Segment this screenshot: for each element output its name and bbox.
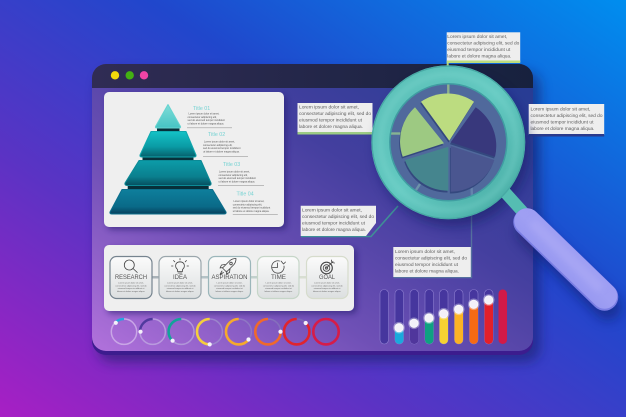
step card: goal: eiusmod tempor incididunt ut bbox=[314, 287, 341, 290]
pyramid label: Title 02: ut labore et dolore magna aliqua. bbox=[203, 150, 240, 153]
step card: idea: eiusmod tempor incididunt ut bbox=[167, 287, 194, 290]
pie chart bbox=[399, 94, 496, 194]
slider knobs bbox=[394, 295, 493, 332]
slider fills bbox=[395, 290, 507, 344]
step card: aspiration: eiusmod tempor incididunt ut bbox=[216, 287, 243, 290]
lens ring bbox=[372, 66, 524, 218]
lens spokes bbox=[390, 84, 472, 198]
slice: green bbox=[400, 107, 444, 157]
pyramid label: Title 04: sed do eiusmod tempor incididunt bbox=[233, 207, 270, 210]
step card: idea: IDEA bbox=[173, 274, 188, 281]
callout: top: Lorem ipsum dolor sit amet, bbox=[447, 34, 507, 40]
callout: lower left bbox=[301, 206, 398, 236]
handle grip bbox=[527, 221, 604, 297]
ring 3: teal bbox=[169, 319, 194, 344]
callout: upper left: labore et dolore magna aliqua. bbox=[299, 124, 363, 130]
step card: goal: consectetur adipiscing elit, sed do bbox=[311, 284, 343, 287]
step card: time: eiusmod tempor incididunt ut bbox=[265, 287, 292, 290]
pyramid label: Title 03: ut labore et dolore magna aliqua. bbox=[218, 180, 255, 183]
icon: clock bbox=[272, 261, 286, 273]
slice: lime bbox=[421, 94, 474, 141]
slice: indigo bbox=[451, 107, 496, 157]
pyramid label: Title 02: Title 02 bbox=[208, 132, 225, 138]
callout: right: labore et dolore magna aliqua. bbox=[530, 126, 594, 132]
pyramid label: Title 03: sed do eiusmod tempor incididunt bbox=[218, 177, 256, 180]
icon: rocket bbox=[220, 258, 236, 274]
step card: research: consectetur adipiscing elit, sed do bbox=[115, 284, 147, 287]
pyramid label: Title 01: sed do eiusmod tempor incididunt bbox=[188, 119, 225, 122]
callout: lower left: Lorem ipsum dolor sit amet, bbox=[302, 208, 362, 214]
step card: time: consectetur adipiscing elit, sed do bbox=[263, 284, 295, 287]
step card: aspiration: labore et dolore magna aliqua. bbox=[215, 290, 244, 293]
ring 6: orange bbox=[255, 319, 283, 344]
ring 8: crimson bbox=[313, 319, 339, 344]
callout: lower centre bbox=[393, 205, 472, 278]
pyramid label: Title 03: consectetur adipiscing elit, bbox=[218, 174, 248, 177]
progress rings bbox=[111, 319, 339, 346]
pyramid label: Title 01: Title 01 bbox=[193, 106, 210, 112]
ring 7: red bbox=[284, 319, 309, 344]
callout: lower centre: eiusmod tempor incididunt ut bbox=[395, 262, 459, 268]
step card: research: Lorem ipsum dolor sit amet, bbox=[118, 282, 144, 284]
step card: goal: Lorem ipsum dolor sit amet, bbox=[314, 282, 340, 284]
browser window panel bbox=[92, 64, 540, 362]
pyramid label: Title 02: sed do eiusmod tempor incididunt bbox=[203, 147, 241, 150]
step card: time: Lorem ipsum dolor sit amet, bbox=[266, 282, 292, 284]
callout: right bbox=[529, 104, 604, 136]
callout: upper left: Lorem ipsum dolor sit amet, bbox=[299, 104, 359, 110]
step card: aspiration: consectetur adipiscing elit, sed do bbox=[214, 284, 246, 287]
handle neck bbox=[503, 190, 530, 220]
pyramid label: Title 01: consectetur adipiscing elit, bbox=[188, 116, 217, 119]
pyramid label: Title 02: consectetur adipiscing elit, bbox=[203, 144, 233, 147]
callout: lower left: consectetur adipiscing elit, sed do bbox=[302, 214, 374, 220]
pyramid label: Title 04: consectetur adipiscing elit, bbox=[233, 203, 262, 206]
slice: slate bbox=[451, 146, 494, 192]
pyramid label: Title 03: Title 03 bbox=[223, 162, 240, 168]
step card: time: labore et dolore magna aliqua. bbox=[264, 290, 293, 293]
callout: upper left: consectetur adipiscing elit, sed do bbox=[299, 111, 371, 117]
pyramid label: Title 04: ut labore et dolore magna aliqua. bbox=[233, 210, 270, 213]
panel: pyramid infographic bbox=[104, 92, 287, 230]
step card: research: RESEARCH bbox=[115, 274, 147, 281]
pyramid chart bbox=[110, 104, 226, 214]
callout: right: consectetur adipiscing elit, sed do bbox=[530, 113, 603, 119]
step card: aspiration bbox=[208, 256, 250, 298]
panel: process steps bbox=[104, 245, 357, 314]
slice: teal bbox=[405, 147, 448, 191]
step card: aspiration: ASPIRATION bbox=[212, 274, 248, 281]
step card: idea: Lorem ipsum dolor sit amet, bbox=[167, 282, 193, 284]
ring 1: blue bbox=[111, 319, 137, 344]
pyramid label: Title 03: Lorem ipsum dolor sit amet, bbox=[219, 170, 250, 174]
ring 2: violet bbox=[138, 319, 165, 344]
step card: aspiration: Lorem ipsum dolor sit amet, bbox=[217, 282, 243, 284]
pyramid label: Title 01: ut labore et dolore magna aliqua. bbox=[188, 122, 224, 125]
step card: idea: consectetur adipiscing elit, sed do bbox=[164, 284, 196, 287]
step card: goal: labore et dolore magna aliqua. bbox=[313, 290, 341, 293]
callout: right: Lorem ipsum dolor sit amet, bbox=[530, 106, 590, 112]
slider bar chart bbox=[380, 290, 507, 344]
step card: goal bbox=[306, 256, 348, 298]
pyramid label: Title 04 bbox=[233, 192, 278, 215]
icon: magnifier bbox=[124, 260, 137, 272]
pyramid label: Title 04: Lorem ipsum dolor sit amet, bbox=[234, 200, 265, 203]
step card: idea bbox=[159, 256, 201, 298]
pyramid label: Title 02 bbox=[203, 132, 248, 157]
callout: top: eiusmod tempor incididunt ut bbox=[447, 47, 511, 53]
step card: time: TIME bbox=[271, 274, 287, 281]
step card: research: eiusmod tempor incididunt ut bbox=[118, 287, 145, 290]
callout: lower left: eiusmod tempor incididunt ut bbox=[302, 220, 366, 226]
callout: lower centre: consectetur adipiscing elit, sed do bbox=[395, 256, 467, 262]
icon: target bbox=[321, 260, 334, 274]
callout: right: eiusmod tempor incididunt ut bbox=[530, 120, 594, 126]
pyramid label: Title 01 bbox=[187, 106, 232, 128]
pie slice shadows bbox=[399, 95, 495, 194]
magnifying glass bbox=[372, 66, 608, 307]
callout: top bbox=[447, 32, 520, 74]
window control dots bbox=[111, 71, 148, 80]
magnifier shadow bbox=[377, 74, 608, 307]
callout: upper left: eiusmod tempor incididunt ut bbox=[299, 118, 363, 124]
pyramid label: Title 03 bbox=[218, 162, 264, 186]
step card: research: labore et dolore magna aliqua. bbox=[117, 290, 145, 293]
step card: goal: GOAL bbox=[319, 274, 335, 281]
pyramid label: Title 02: Lorem ipsum dolor sit amet, bbox=[204, 140, 235, 144]
pyramid label: Title 01: Lorem ipsum dolor sit amet, bbox=[188, 112, 220, 116]
icon: light bulb bbox=[172, 258, 188, 273]
step card: idea: labore et dolore magna aliqua. bbox=[166, 290, 194, 293]
callout: upper left bbox=[298, 103, 372, 134]
callout: lower left: labore et dolore magna aliqua. bbox=[302, 227, 366, 233]
step card: research bbox=[110, 256, 152, 298]
step card: time bbox=[258, 256, 299, 298]
slider tracks bbox=[380, 290, 493, 344]
lens disc bbox=[388, 82, 508, 202]
callout: top: consectetur adipiscing elit, sed do bbox=[447, 40, 520, 46]
pyramid label: Title 04: Title 04 bbox=[236, 192, 254, 198]
ring 5: amber bbox=[226, 319, 251, 344]
callout: lower centre: labore et dolore magna aliqua. bbox=[395, 268, 459, 274]
callout: lower centre: Lorem ipsum dolor sit amet, bbox=[395, 249, 455, 255]
connector bars bbox=[152, 276, 306, 278]
ring 4: yellow bbox=[197, 319, 222, 346]
callout: top: labore et dolore magna aliqua. bbox=[447, 54, 511, 60]
